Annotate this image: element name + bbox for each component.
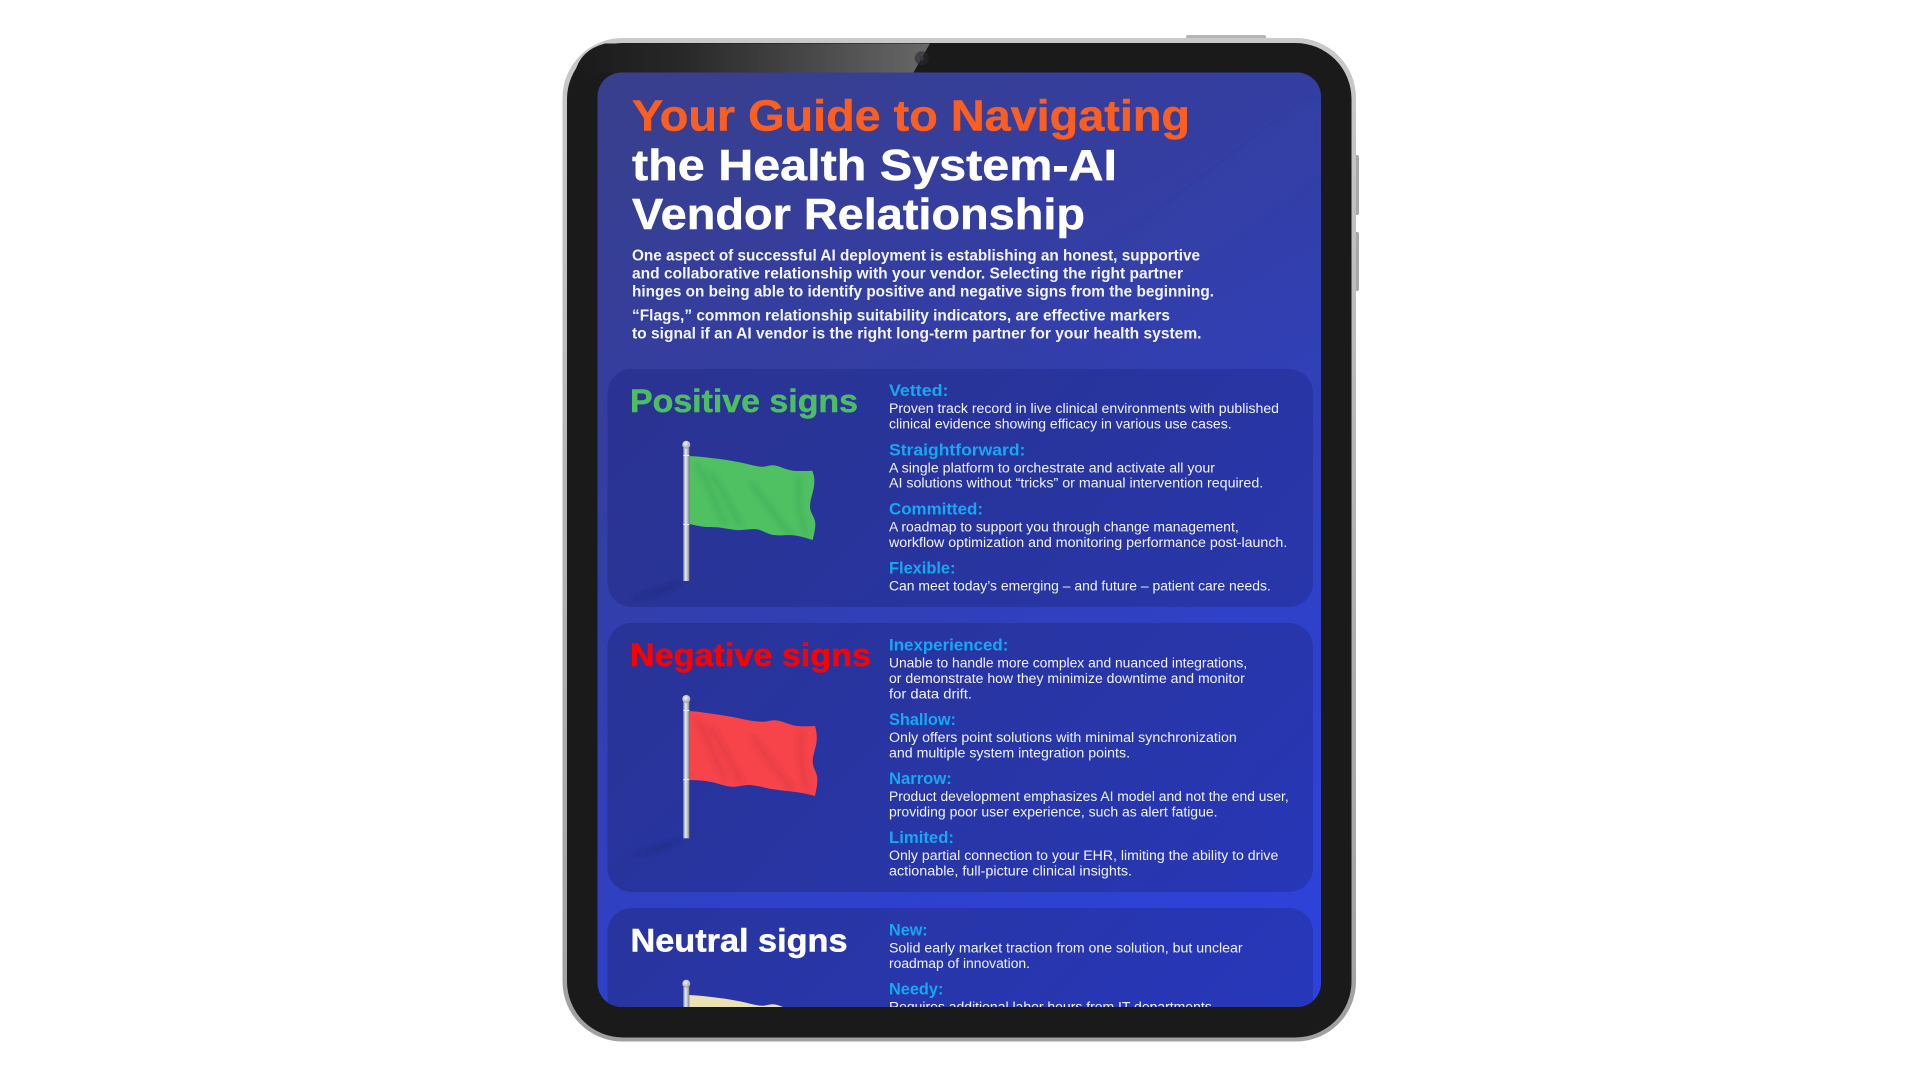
icon: red flag: [642, 695, 818, 854]
item: new: Solid early market traction from one solution, but unclear: [889, 940, 1243, 956]
item: needy: Needy:: [889, 980, 943, 999]
item: new: roadmap of innovation.: [889, 956, 1030, 972]
heading: neutral signs: Neutral signs: [630, 922, 848, 958]
heading: positive signs: Positive signs: [630, 383, 858, 419]
silver bezel ring: [562, 38, 1356, 1042]
flags paragraph: to signal if an AI vendor is the right long-term partner for your health system.: [632, 326, 1202, 343]
item: vetted: [889, 381, 1279, 433]
infographic on tablet mockup: [562, 35, 1359, 1042]
bezel glare: [575, 44, 930, 73]
item: committed: A roadmap to support you through change management,: [889, 519, 1239, 535]
item: inexperienced: for data drift.: [889, 687, 972, 703]
item: limited: Only partial connection to your EHR, limiting the ability to drive: [889, 848, 1278, 864]
item: inexperienced: [889, 638, 1246, 698]
item: shallow: and multiple system integration points.: [889, 746, 1130, 762]
intro paragraph: and collaborative relationship with your vendor. Selecting the right partner: [632, 266, 1183, 283]
item: narrow: Product development emphasizes AI model and not the end user,: [889, 789, 1289, 805]
panel background: [608, 908, 1313, 1007]
title: Vendor Relationship: [632, 190, 1085, 239]
diagonal sheen: [1000, 95, 1321, 340]
item: straightforward: Straightforward:: [889, 440, 1025, 459]
item: narrow: [889, 769, 1289, 821]
panel: negative signs: [608, 623, 1313, 892]
item: limited: actionable, full-picture clinical insights.: [889, 864, 1132, 880]
tablet device frame: [562, 35, 1359, 1042]
item: vetted: Proven track record in live clinical environments with published: [889, 401, 1279, 417]
item: inexperienced: Inexperienced:: [889, 635, 1008, 654]
flags paragraph: [632, 308, 1202, 343]
screen: [598, 72, 1321, 1068]
icon: cream flag: [682, 980, 783, 1007]
icon: green flag: [644, 440, 816, 597]
item: flexible: Can meet today’s emerging – and future – patient care needs.: [889, 578, 1271, 594]
item: needy: [890, 982, 1212, 1007]
item: committed: [888, 499, 1287, 551]
title: Your Guide to Navigating: [632, 92, 1190, 140]
item: vetted: Vetted:: [889, 381, 948, 400]
flags paragraph: “Flags,” common relationship suitability indicators, are effective markers: [632, 308, 1170, 325]
item: straightforward: A single platform to orchestrate and activate all your: [889, 460, 1215, 476]
item: straightforward: [889, 440, 1263, 492]
item: narrow: providing poor user experience, such as alert fatigue.: [889, 805, 1218, 821]
item: inexperienced: or demonstrate how they minimize downtime and monitor: [889, 671, 1245, 687]
side volume buttons: [1352, 155, 1359, 291]
item: limited: Limited:: [889, 828, 954, 847]
title: [632, 92, 1190, 239]
item: flexible: [890, 562, 1270, 594]
item: new: [889, 920, 1243, 972]
item: committed: workflow optimization and monitoring performance post-launch.: [888, 535, 1287, 551]
item: flexible: Flexible:: [889, 559, 956, 578]
item: shallow: [889, 710, 1237, 762]
screen background: [598, 72, 1321, 1007]
panel: positive signs: [608, 369, 1313, 607]
title: the Health System-AI: [632, 141, 1117, 190]
item: inexperienced: Unable to handle more complex and nuanced integrations,: [889, 655, 1247, 671]
item: narrow: Narrow:: [889, 769, 952, 788]
item: needy: Requires additional labor hours from IT departments: [889, 1000, 1212, 1016]
item: committed: Committed:: [889, 499, 983, 518]
item: straightforward: AI solutions without “tricks” or manual intervention required.: [889, 476, 1263, 492]
item: new: New:: [889, 920, 928, 939]
item: shallow: Only offers point solutions with minimal synchronization: [889, 730, 1237, 746]
panel: neutral signs: [608, 908, 1313, 1007]
intro paragraph: hinges on being able to identify positive and negative signs from the beginning.: [632, 284, 1214, 301]
top power button: [1186, 35, 1266, 43]
panel background: [608, 623, 1313, 892]
camera: [915, 51, 929, 65]
item: shallow: Shallow:: [889, 710, 956, 729]
intro paragraph: One aspect of successful AI deployment is establishing an honest, supportive: [632, 248, 1200, 265]
panel background: [608, 369, 1313, 607]
heading: negative signs: Negative signs: [630, 637, 871, 673]
item: vetted: clinical evidence showing efficacy in various use cases.: [889, 417, 1232, 433]
black bezel: [567, 43, 1352, 1038]
item: limited: [889, 828, 1278, 880]
intro paragraph: [632, 248, 1214, 301]
